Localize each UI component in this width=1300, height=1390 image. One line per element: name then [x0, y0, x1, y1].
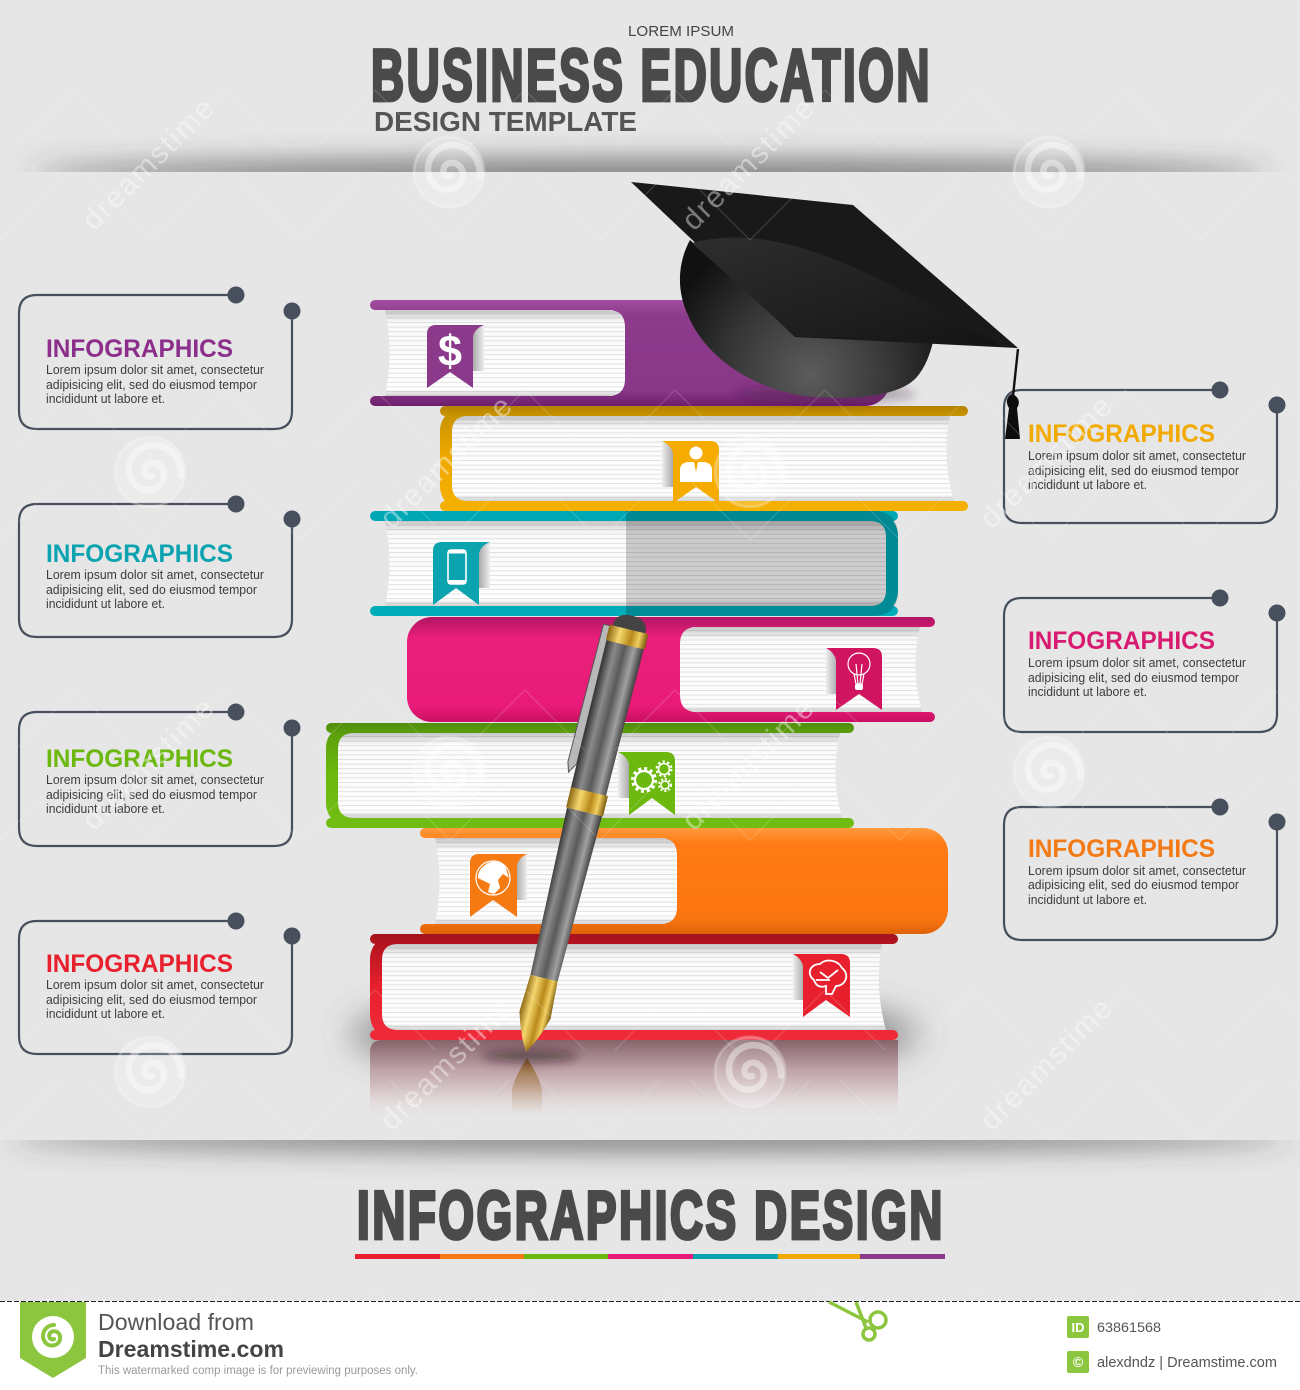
subtitle: DESIGN TEMPLATE: [374, 106, 637, 137]
callout: purple: Lorem ipsum dolor sit amet, consectetur: [46, 363, 264, 377]
bookmark: dollar: [427, 325, 484, 388]
cap board: [631, 182, 1018, 348]
callout: teal: Lorem ipsum dolor sit amet, consectetur: [46, 568, 264, 582]
callout: pink: Lorem ipsum dolor sit amet, consectetur: [1028, 656, 1246, 670]
callout: red: [19, 912, 300, 1054]
dreamstime watermarks: dreamstime: [676, 92, 821, 237]
callout: yellow: [1004, 382, 1286, 523]
header text: [371, 24, 932, 137]
dreamstime watermarks: dreamstime: [676, 692, 821, 837]
book: pink: [407, 617, 935, 722]
image id: [1067, 1316, 1161, 1338]
tassel: [1005, 349, 1020, 439]
upper barrel: [571, 639, 644, 798]
callout: orange: Lorem ipsum dolor sit amet, consectetur: [1028, 864, 1246, 878]
callout: pink: [1004, 590, 1286, 732]
callout: purple: adipisicing elit, sed do eiusmod tempor: [46, 378, 257, 392]
callout: green: Lorem ipsum dolor sit amet, consectetur: [46, 773, 264, 787]
bottom band shadow: [10, 1125, 1290, 1149]
cap sheen: [692, 237, 1000, 345]
book: purple: [370, 300, 890, 406]
callout: red: incididunt ut labore et.: [46, 1007, 165, 1021]
author credit: ©: [1073, 1354, 1084, 1370]
bottom heading: INFOGRAPHICS DESIGN: [357, 1178, 945, 1254]
cap skull: [680, 240, 934, 398]
callout: red: INFOGRAPHICS: [46, 950, 233, 978]
footer panel: [0, 1301, 1300, 1390]
top band shadow: [30, 162, 1270, 186]
callout: yellow: INFOGRAPHICS: [1028, 420, 1215, 448]
callout: red: adipisicing elit, sed do eiusmod tempor: [46, 993, 257, 1007]
nib: [510, 974, 560, 1056]
dreamstime watermarks: dreamstime: [76, 92, 221, 237]
book: red: [370, 934, 898, 1040]
nib reflection: [512, 1058, 542, 1115]
image id: ID: [1072, 1320, 1084, 1335]
dreamstime watermarks: dreamstime: [374, 390, 519, 535]
callout: purple: INFOGRAPHICS: [46, 335, 233, 363]
pen clip: [566, 624, 610, 774]
dreamstime watermarks: dreamstime: [974, 992, 1119, 1137]
bookmark: dollar: $: [438, 327, 462, 376]
lower barrel: [527, 808, 602, 982]
bookmark: globe: [470, 854, 527, 917]
image id: 63861568: [1097, 1319, 1161, 1335]
callout: teal: [19, 496, 300, 637]
colour bar: [355, 1254, 945, 1259]
callout: yellow: adipisicing elit, sed do eiusmod tempor: [1028, 464, 1239, 478]
book: yellow: [440, 406, 968, 511]
bookmark: light bulb: [826, 648, 882, 710]
ground shadow: [349, 998, 919, 1070]
book reflection: [370, 1040, 898, 1122]
bookmark: businessman: [662, 441, 719, 503]
book: orange: [420, 828, 948, 934]
cap dome: [612, 612, 649, 634]
author credit: [1067, 1351, 1277, 1373]
dreamstime watermarks: [76, 92, 1119, 1137]
callout: teal: incididunt ut labore et.: [46, 597, 165, 611]
book: teal: [370, 511, 898, 616]
callout: green: [19, 704, 300, 846]
callout: yellow: incididunt ut labore et.: [1028, 478, 1147, 492]
eyebrow: LOREM IPSUM: [628, 24, 734, 40]
brand text: Dreamstime.com: [98, 1336, 284, 1362]
bookmark: phone: [433, 542, 490, 605]
book: green: [326, 723, 854, 828]
callout: pink: incididunt ut labore et.: [1028, 685, 1147, 699]
callout: yellow: Lorem ipsum dolor sit amet, consectetur: [1028, 449, 1246, 463]
callout: green: incididunt ut labore et.: [46, 802, 165, 816]
callout: purple: incididunt ut labore et.: [46, 392, 165, 406]
bookmark: brain: [793, 954, 850, 1017]
callout: purple: [19, 286, 300, 429]
download text: Download from: [98, 1309, 254, 1335]
callout: pink: adipisicing elit, sed do eiusmod tempor: [1028, 671, 1239, 685]
callout: orange: adipisicing elit, sed do eiusmod tempor: [1028, 878, 1239, 892]
teal shaded half: [626, 511, 898, 616]
callout: orange: [1004, 798, 1286, 940]
callout: orange: incididunt ut labore et.: [1028, 893, 1147, 907]
callout: red: Lorem ipsum dolor sit amet, consectetur: [46, 978, 264, 992]
callout: green: adipisicing elit, sed do eiusmod tempor: [46, 788, 257, 802]
bookmark: gears: [618, 752, 675, 815]
icon: download ribbon: [20, 1302, 86, 1378]
callout: teal: INFOGRAPHICS: [46, 540, 233, 568]
callout: teal: adipisicing elit, sed do eiusmod tempor: [46, 583, 257, 597]
callout: orange: INFOGRAPHICS: [1028, 835, 1215, 863]
dreamstime watermarks: dreamstime: [974, 390, 1119, 535]
dreamstime watermarks: dreamstime: [374, 992, 519, 1137]
author credit: alexdndz | Dreamstime.com: [1097, 1355, 1277, 1371]
fountain pen: [499, 609, 652, 1057]
disclaimer: This watermarked comp image is for previewing purposes only.: [98, 1365, 418, 1377]
icon: scissors: [829, 1302, 886, 1340]
callout: green: INFOGRAPHICS: [46, 745, 233, 773]
callout: pink: INFOGRAPHICS: [1028, 627, 1215, 655]
top ring: [606, 625, 648, 650]
cap shadow on book: [735, 385, 915, 403]
title: BUSINESS EDUCATION: [371, 36, 932, 116]
middle ring: [566, 787, 608, 817]
graduation cap: [631, 182, 1020, 439]
nib contact shadow: [482, 1050, 578, 1062]
dreamstime watermarks: dreamstime: [76, 692, 221, 837]
